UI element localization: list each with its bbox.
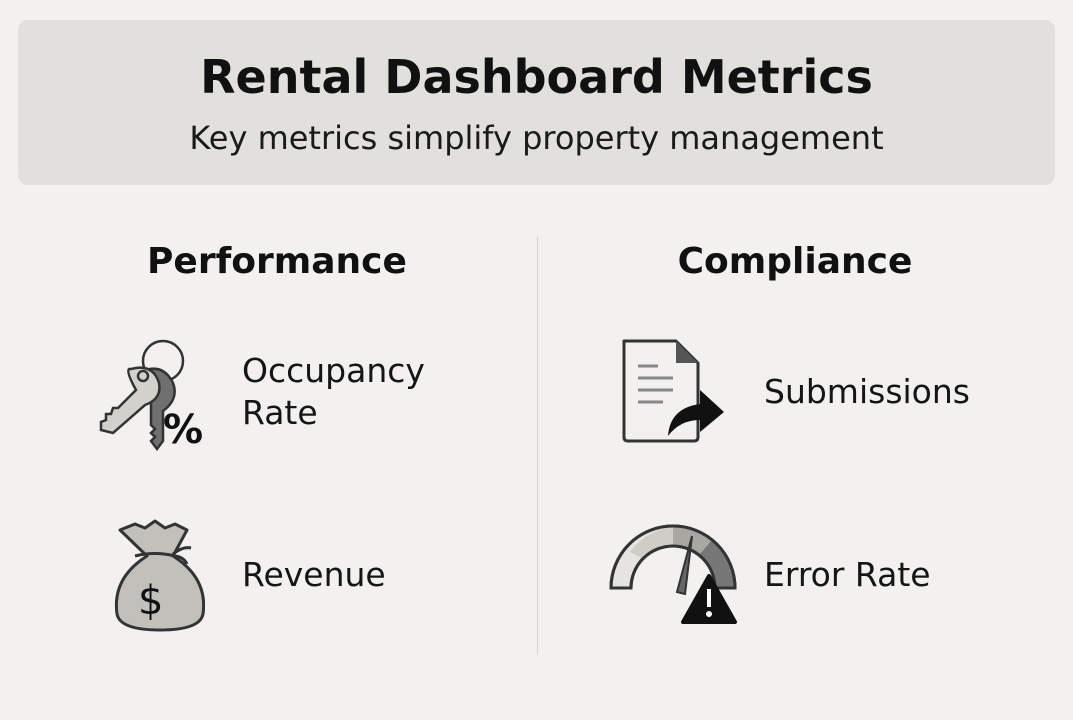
- label: Occupancy Rate: Rate: [242, 393, 318, 432]
- icon: document with arrow: [622, 340, 724, 442]
- icon: keys with percent: [100, 340, 203, 451]
- label: Error Rate: Error Rate: [764, 555, 931, 594]
- heading: Performance: Performance: [147, 241, 407, 282]
- label: Occupancy Rate: [242, 351, 425, 432]
- title: Rental Dashboard Metrics: [200, 50, 873, 104]
- heading: Compliance: Compliance: [678, 241, 912, 282]
- header panel: [18, 20, 1055, 185]
- icon: money bag: [114, 520, 205, 632]
- label: Occupancy Rate: Occupancy: [242, 351, 425, 390]
- label: Revenue: Revenue: [242, 555, 386, 594]
- icon: money bag: $: [138, 578, 163, 624]
- subtitle: Key metrics simplify property management: [189, 119, 884, 157]
- label: Submissions: Submissions: [764, 372, 970, 411]
- icon: gauge with warning: [610, 524, 738, 624]
